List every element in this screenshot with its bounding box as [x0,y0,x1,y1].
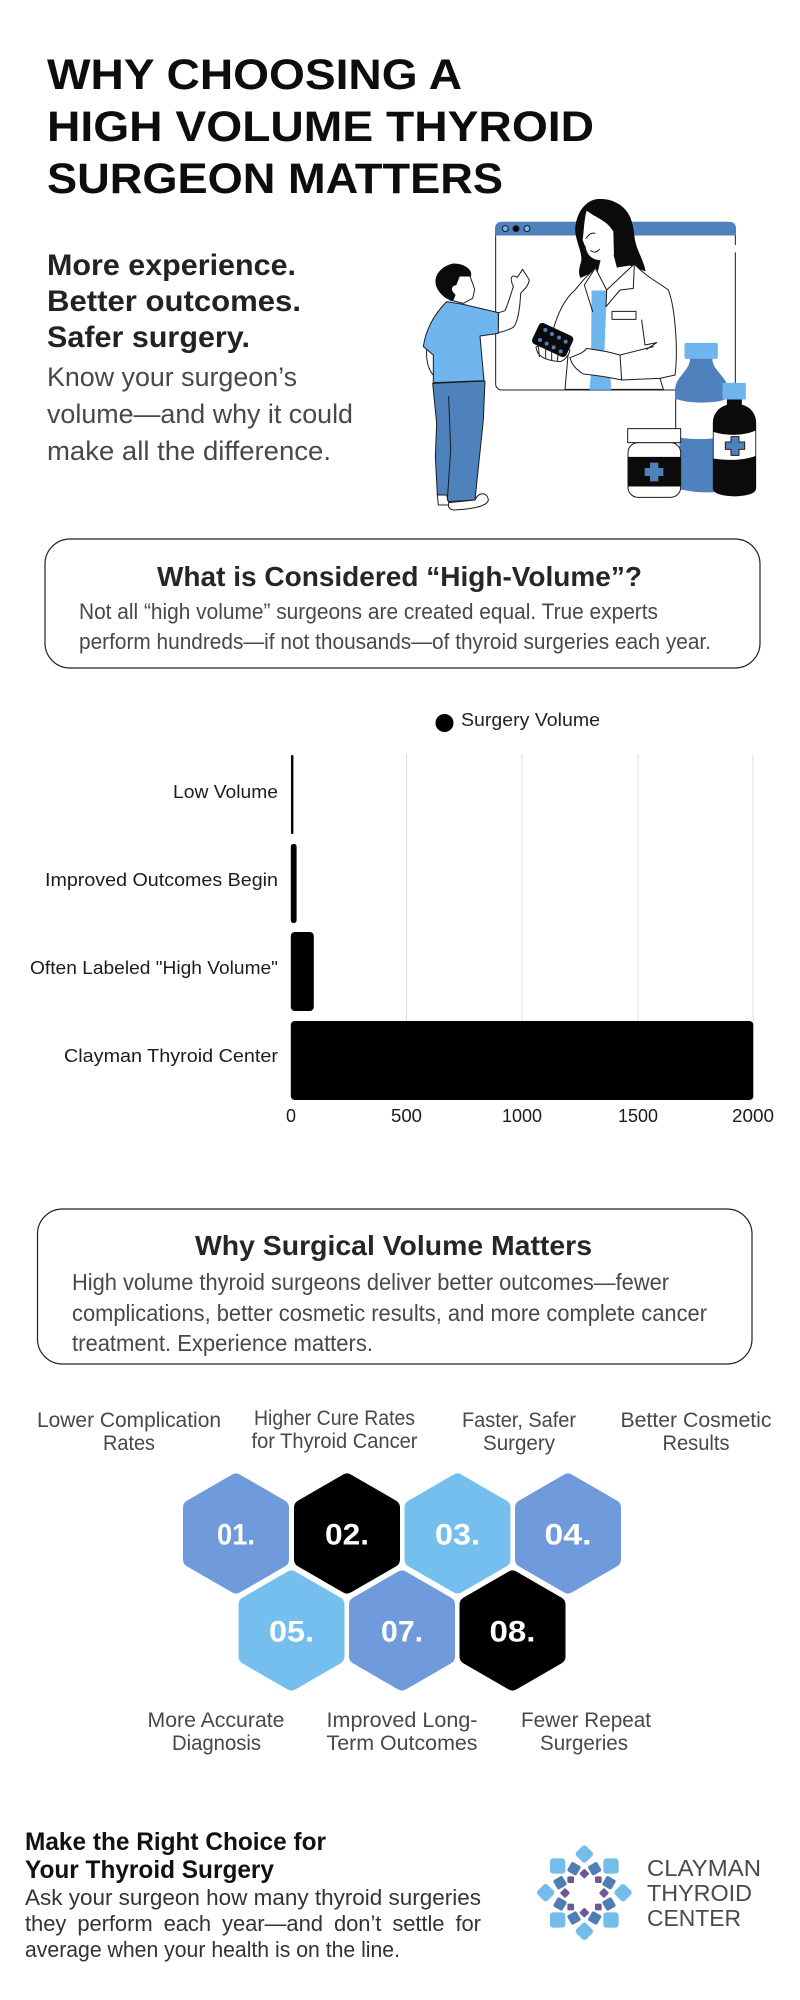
tagline: Safer surgery. [47,321,250,354]
benefit labels: top row: Surgery [483,1432,555,1455]
value axis: 1000 [502,1106,542,1126]
illustration: doctor on screen, patient and medicine bottles [423,199,756,510]
panel: what is high volume [45,539,760,668]
bars [291,755,753,1100]
jar [628,429,681,497]
hexagon grid [191,1482,613,1682]
bar chart: surgery volume [30,710,774,1126]
patient [423,264,529,510]
logo wordmark: CENTER [647,1905,741,1931]
body text: treatment. Experience matters. [72,1330,373,1356]
value axis: 1500 [618,1106,658,1126]
body text: Not all “high volume” surgeons are created equal. True experts [79,599,658,624]
benefit labels: top row: Rates [103,1432,155,1455]
black bottle [713,383,756,496]
title [47,51,594,203]
hexagon 02: 02. [325,1518,369,1552]
hexagon 04 [523,1482,613,1586]
call to action [25,1828,481,1962]
legend: Surgery Volume [461,710,600,730]
browser window [496,222,738,390]
hexagon 08 [468,1578,558,1682]
body text [72,1269,707,1356]
hexagon 03 [412,1482,502,1586]
hexagon 05: 05. [269,1616,314,1648]
body text: High volume thyroid surgeons deliver better outcomes—fewer [72,1269,669,1295]
benefit labels: top row: Results [662,1432,730,1455]
panel: why surgical volume matters [38,1209,752,1364]
benefit labels: bottom row: Surgeries [540,1732,628,1755]
call to action text: they perform each year—and don’t settle for [25,1911,481,1936]
value axis: 2000 [732,1106,774,1126]
benefit labels: top row: Lower Complication [37,1409,221,1432]
hexagon 07 [357,1578,447,1682]
benefit labels: top row: Faster, Safer [462,1409,576,1432]
logo: Clayman Thyroid Center [536,1844,761,1941]
body text [79,599,711,654]
benefit labels: top row [37,1407,772,1455]
call to action heading: Your Thyroid Surgery [25,1856,274,1884]
benefit labels: bottom row: Improved Long- [326,1709,478,1732]
body text: complications, better cosmetic results, and more complete cancer [72,1300,707,1326]
benefit labels: bottom row: Diagnosis [172,1732,261,1755]
intro text: make all the difference. [47,436,331,466]
benefit labels: top row: Better Cosmetic [620,1409,772,1432]
benefit labels: bottom row: Fewer Repeat [521,1709,651,1732]
value axis: 0 [286,1106,296,1126]
hexagon 01: 01. [217,1518,255,1552]
benefit labels: bottom row: Term Outcomes [326,1732,478,1755]
hexagon 03: 03. [435,1518,480,1552]
title: SURGEON MATTERS [47,155,503,203]
logo wordmark: CLAYMAN [647,1855,761,1881]
doctor [531,199,676,389]
benefit labels: bottom row [148,1709,651,1755]
intro text [47,362,353,466]
category labels: Often Labeled "High Volume" [30,958,278,978]
tagline [47,249,301,354]
large blue bottle [676,343,727,492]
logo wordmark: THYROID [647,1880,752,1906]
hexagon 08: 08. [490,1616,535,1648]
benefit labels: top row: for Thyroid Cancer [252,1430,418,1453]
hexagon 02 [302,1482,392,1586]
benefit labels: bottom row: More Accurate [148,1709,284,1732]
hexagon 01 [191,1482,281,1586]
body text: perform hundreds—if not thousands—of thyroid surgeries each year. [79,629,711,654]
call to action text [25,1885,481,1962]
logo mark [536,1844,633,1941]
category labels: Clayman Thyroid Center [64,1046,278,1066]
call to action text: Ask your surgeon how many thyroid surgeries [25,1885,481,1910]
benefit labels: top row: Higher Cure Rates [254,1407,415,1430]
value axis [286,1106,774,1126]
value axis: 500 [391,1106,422,1126]
title: WHY CHOOSING A [47,51,462,99]
tagline: Better outcomes. [47,285,301,318]
heading: What is Considered “High-Volume”? [157,561,642,592]
intro text: volume—and why it could [47,399,353,429]
intro text: Know your surgeon’s [47,362,297,392]
call to action heading [25,1828,326,1884]
hexagon 05 [246,1578,336,1682]
call to action text: average when your health is on the line. [25,1937,400,1962]
hexagon 04: 04. [544,1518,592,1552]
heading: Why Surgical Volume Matters [195,1230,592,1261]
logo wordmark [647,1855,761,1931]
call to action heading: Make the Right Choice for [25,1828,326,1856]
category labels: Improved Outcomes Begin [45,870,278,890]
category labels: Low Volume [173,782,278,802]
hexagon 07: 07. [381,1616,423,1648]
tagline: More experience. [47,249,296,282]
title: HIGH VOLUME THYROID [47,103,594,151]
category labels [30,782,278,1066]
